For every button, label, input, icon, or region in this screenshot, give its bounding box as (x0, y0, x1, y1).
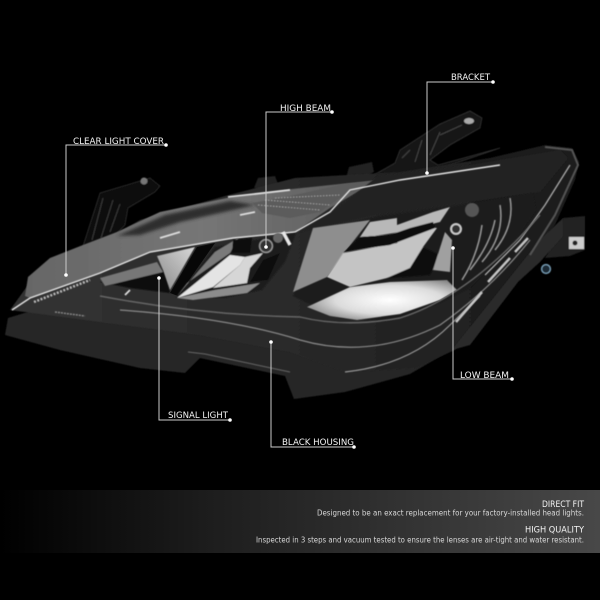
callout: clear light cover (64, 137, 168, 277)
cover highlight line (12, 165, 500, 310)
low beam bright lower lens (307, 280, 457, 320)
signal light reflector (34, 262, 170, 316)
callout: bracket (425, 73, 495, 175)
cover mesh strip (252, 180, 385, 218)
high beam bulb (260, 232, 290, 252)
black housing body (10, 145, 579, 372)
right mounting bracket (365, 111, 500, 180)
callout: low beam (451, 246, 514, 381)
small cover highlights (125, 190, 290, 295)
left mounting bracket (83, 178, 160, 246)
callout: black housing: BLACK HOUSING (282, 438, 354, 448)
feature: high quality heading: HIGH QUALITY (525, 526, 585, 536)
callout: low beam: LOW BEAM (460, 371, 509, 381)
right side clips (456, 238, 528, 322)
callout: signal light (157, 276, 232, 422)
feature band (0, 490, 600, 553)
clear light cover band (25, 180, 378, 298)
headlight assembly (5, 111, 585, 399)
upper housing brow (300, 150, 568, 232)
low beam bulb (451, 203, 479, 234)
callout: black housing (269, 340, 356, 449)
darker top of cover (117, 201, 255, 236)
feature: direct fit description: Designed to be an exact replacement for your factory-installed head lights. (317, 508, 584, 518)
callout: high beam: HIGH BEAM (280, 104, 331, 114)
low beam left reflector (293, 220, 370, 292)
callout: signal light: SIGNAL LIGHT (168, 411, 229, 421)
top tab mounts (254, 162, 374, 190)
feature: direct fit heading: DIRECT FIT (542, 500, 585, 510)
callout: bracket: BRACKET (451, 73, 491, 83)
callout: clear light cover: CLEAR LIGHT COVER (73, 137, 164, 147)
callout: high beam (264, 104, 334, 249)
high beam reflector (176, 233, 296, 300)
right outer rim highlight (530, 147, 578, 255)
right rear mount (542, 216, 585, 274)
signal light white window (157, 247, 195, 290)
right side strap (452, 218, 563, 350)
right bulb streak reflector (462, 198, 511, 280)
low beam opening (293, 193, 536, 321)
low beam facets (327, 207, 452, 287)
lower tray (5, 280, 470, 399)
black divider strip (170, 243, 215, 296)
feature: high quality description: Inspected in 3 steps and vacuum tested to ensure the lenses are air-tight and water resistant. (256, 536, 584, 544)
lens rim curves (100, 215, 540, 372)
